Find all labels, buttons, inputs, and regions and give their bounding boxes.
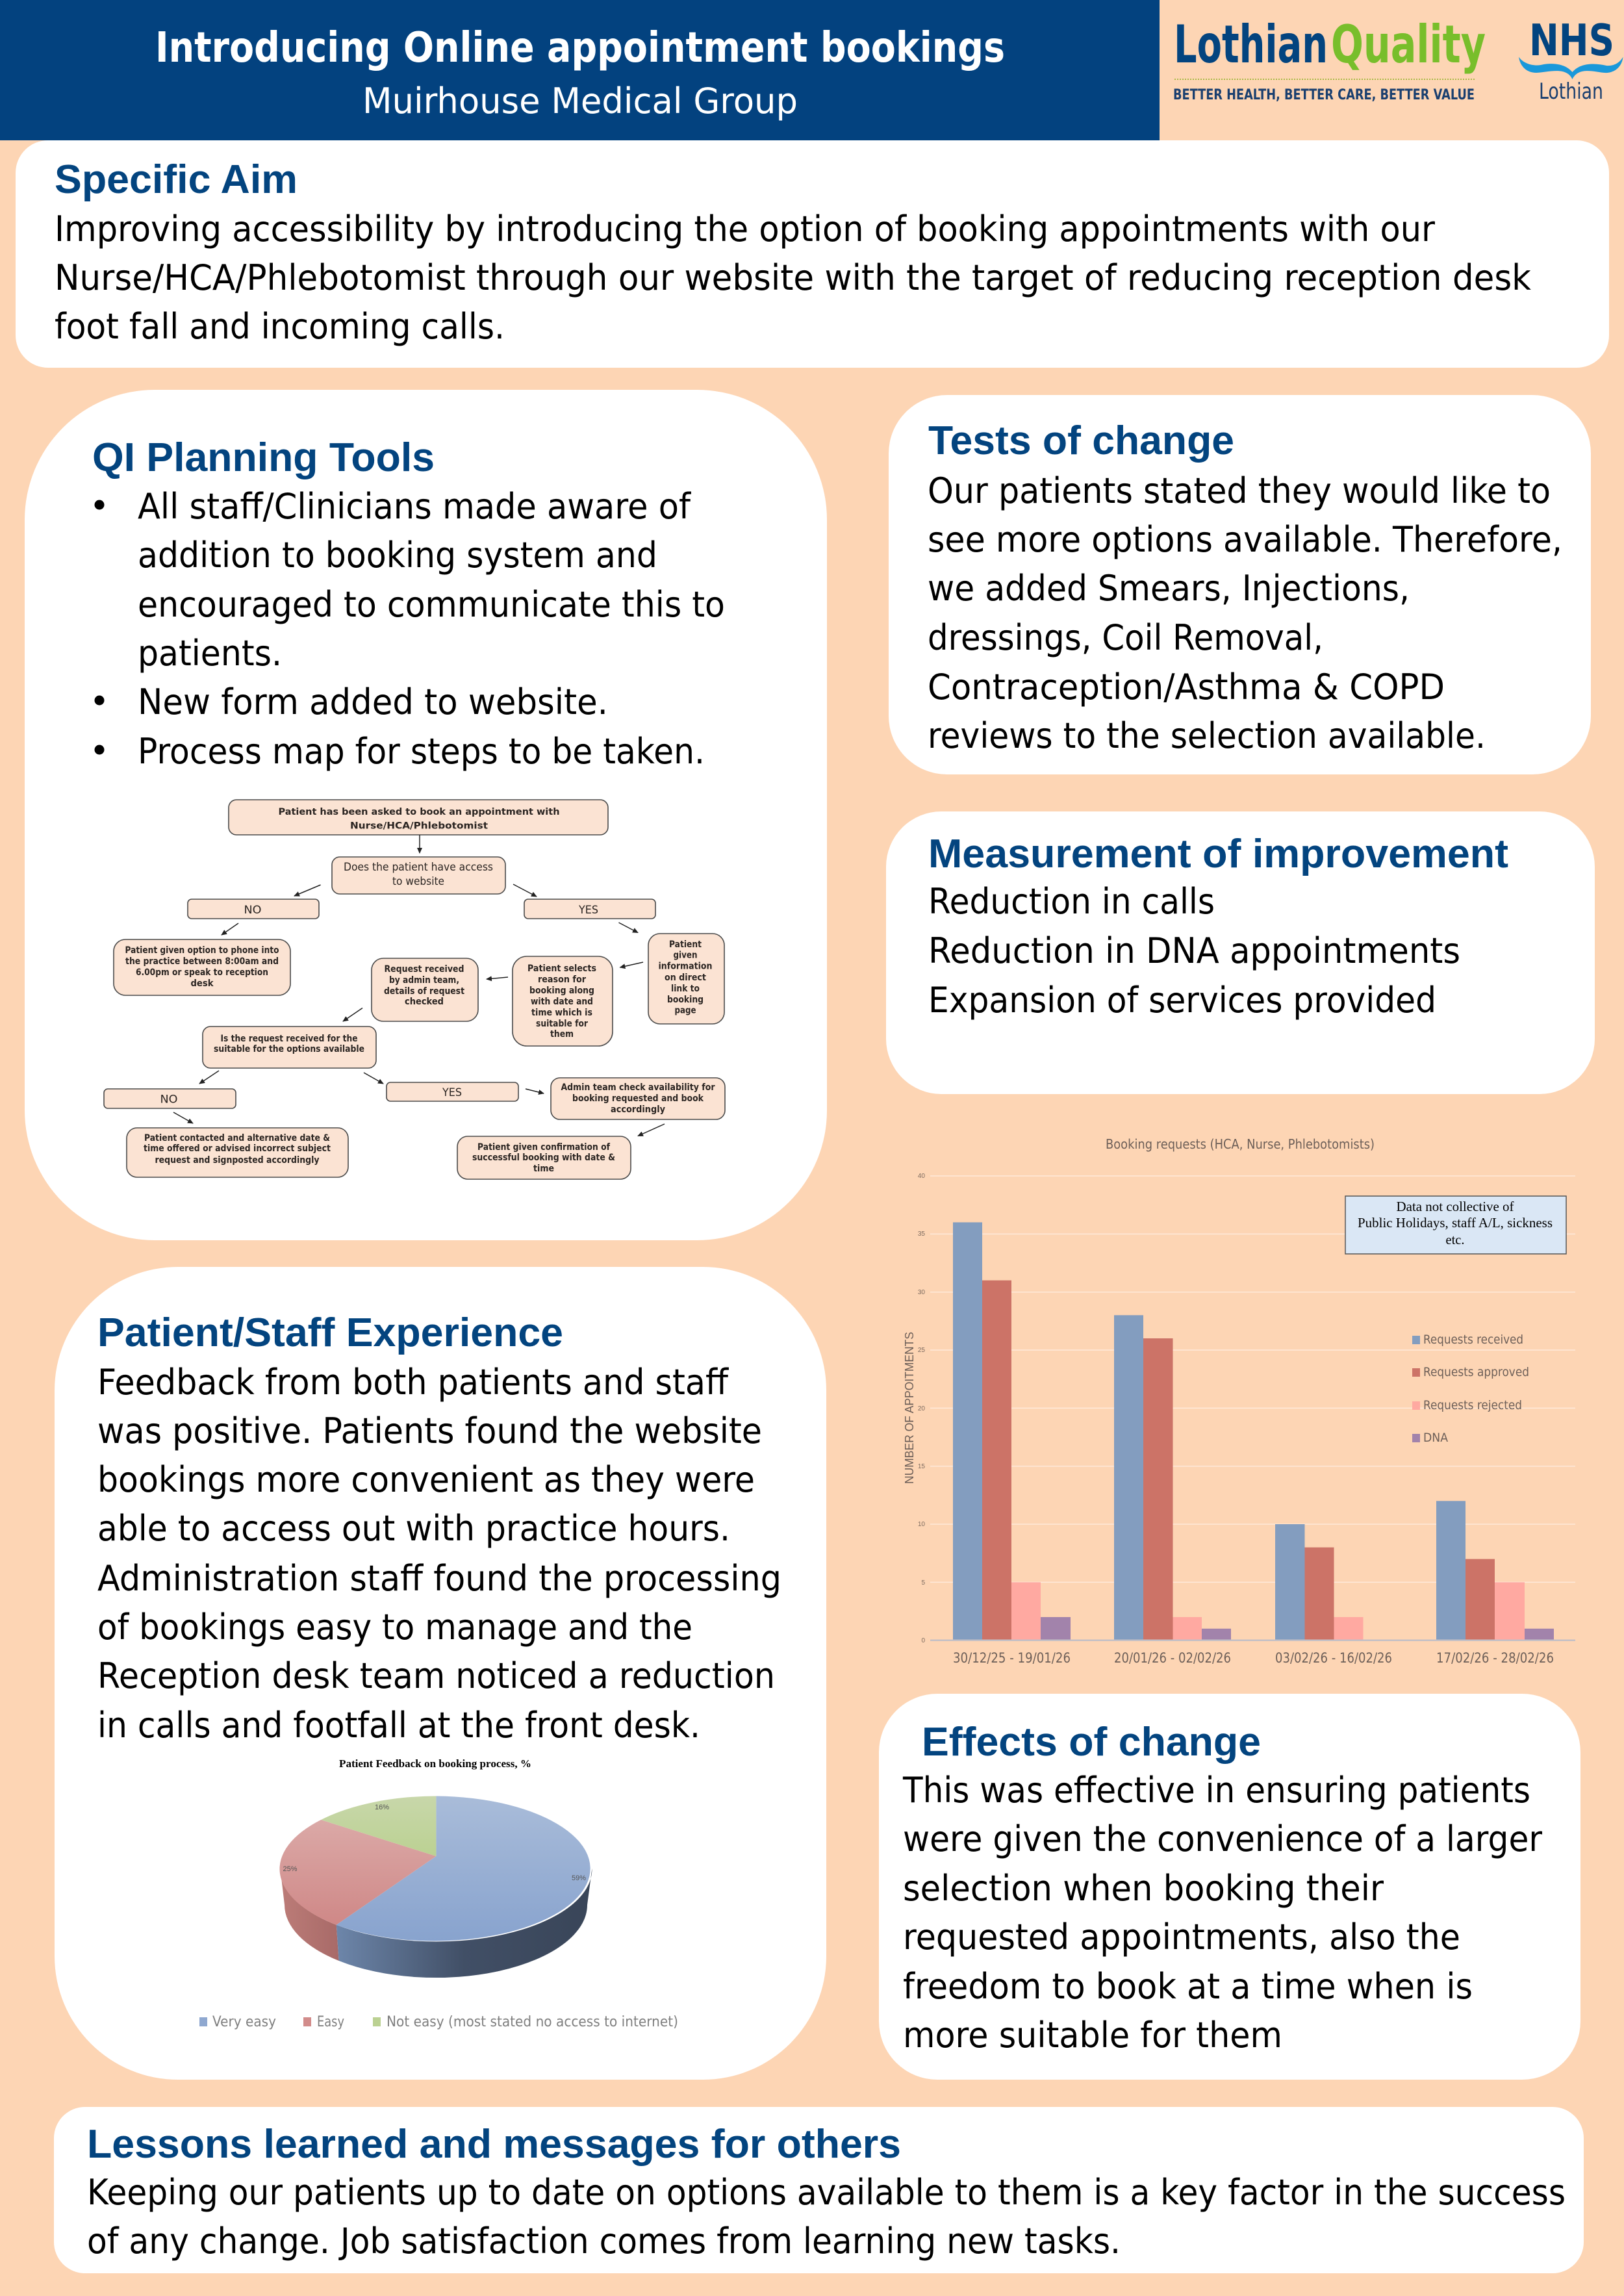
text: patient staff experience: able to access out with practice hours.	[97, 1508, 730, 1549]
flow box: confirmation: time	[533, 1164, 554, 1174]
flow box: suitability question: Is the request received for the	[221, 1034, 358, 1044]
x axis labels: 17/02/26 - 28/02/26	[1436, 1650, 1554, 1666]
text: effects of change: more suitable for them	[903, 2015, 1282, 2056]
text: patient staff experience: was positive. Patients found the website	[97, 1410, 762, 1451]
y axis ticks	[918, 1173, 925, 1644]
flow box: phone option: desk	[191, 978, 214, 989]
text: specific aim: Improving accessibility by introducing the option of booking appointments with our	[55, 209, 1436, 249]
heading: measurement of improvement: Measurement of improvement	[928, 832, 1508, 876]
callout: data note	[1345, 1196, 1566, 1254]
flow box: request received	[372, 958, 478, 1021]
pie value labels: 59%	[572, 1874, 586, 1882]
flow box: direct link info: information	[659, 962, 712, 972]
flow box: request received: checked	[405, 997, 444, 1007]
flow box: direct link info: on direct	[665, 973, 706, 983]
x axis labels	[953, 1650, 1554, 1666]
pie title: Patient Feedback on booking process, %	[339, 1757, 531, 1770]
flow arrows	[173, 835, 665, 1136]
pie value labels	[283, 1804, 586, 1882]
heading: QI planning tools: QI Planning Tools	[92, 435, 435, 480]
text: patient staff experience	[97, 1362, 781, 1746]
panel: tests of change	[889, 395, 1591, 774]
panel: lessons learned	[54, 2107, 1584, 2273]
flow box: no: NO	[244, 904, 261, 917]
logo: Lothian Quality: Quality	[1331, 14, 1486, 75]
subtitle: Muirhouse Medical Group	[362, 81, 798, 121]
bullet list: Process map for steps to be taken.	[138, 731, 705, 772]
flow box: patient selects	[513, 956, 613, 1046]
callout: data note: Public Holidays, staff A/L, sickness	[1358, 1215, 1553, 1231]
flow box: yes: YES	[578, 904, 598, 917]
y axis ticks: 5	[921, 1579, 925, 1587]
y axis ticks: 10	[918, 1521, 925, 1528]
chart legend: DNA	[1423, 1431, 1448, 1445]
flow box: patient selects: time which is	[531, 1008, 592, 1018]
text: lessons learned	[87, 2172, 1566, 2262]
flow box: start: Nurse/HCA/Phlebotomist	[350, 821, 488, 832]
callout: data note: Data not collective of	[1397, 1199, 1514, 1214]
text: patient staff experience: in calls and footfall at the front desk.	[97, 1705, 700, 1746]
bars: 17/02/26 - 28/02/26	[1436, 1501, 1554, 1640]
panel: patient staff experience	[55, 1267, 826, 2080]
pie legend: Not easy (most stated no access to internet)	[387, 2014, 678, 2030]
text: patient staff experience: Reception desk team noticed a reduction	[97, 1655, 775, 1696]
pie side: very easy	[336, 1869, 592, 1978]
heading: lessons learned: Lessons learned and messages for others	[87, 2122, 901, 2167]
text: specific aim: foot fall and incoming calls.	[55, 306, 505, 347]
text: lessons learned: of any change. Job satisfaction comes from learning new tasks.	[87, 2221, 1121, 2262]
pie legend: Easy	[317, 2014, 344, 2030]
flow box: start: Patient has been asked to book an appointment with	[278, 807, 560, 817]
flow box: direct link info: page	[674, 1006, 696, 1016]
text: effects of change: selection when booking their	[903, 1868, 1384, 1909]
y axis ticks: 20	[918, 1405, 925, 1412]
pie side: easy	[280, 1869, 339, 1961]
x axis labels: 20/01/26 - 02/02/26	[1114, 1650, 1231, 1666]
text: specific aim	[55, 209, 1532, 347]
logo: Lothian Quality: Lothian	[1174, 14, 1328, 75]
flow box: confirmation: Patient given confirmation of	[477, 1142, 611, 1153]
flow box: admin team check: accordingly	[611, 1104, 665, 1115]
flow box: patient selects: reason for	[538, 975, 587, 985]
text: patient staff experience: of bookings easy to manage and the	[97, 1607, 692, 1648]
panel: specific aim	[16, 140, 1609, 368]
flow box: patient contacted: Patient contacted and alternative date &	[144, 1133, 330, 1143]
flow box: confirmation: successful booking with date &	[472, 1153, 615, 1163]
text: patient staff experience: bookings more convenient as they were	[97, 1459, 755, 1500]
text: tests of change: Our patients stated they would like to	[928, 470, 1551, 511]
bullet list: All staff/Clinicians made aware of	[138, 486, 692, 527]
heading: patient staff experience: Patient/Staff Experience	[97, 1310, 563, 1355]
flow box: patient selects: booking along	[529, 986, 594, 996]
pie slice: easy	[279, 1820, 436, 1925]
flow box: patient contacted: request and signposted accordingly	[155, 1155, 320, 1166]
pie legend	[199, 2014, 678, 2030]
pie legend: Very easy	[212, 2014, 276, 2030]
callout: data note: etc.	[1446, 1232, 1464, 1247]
panel: effects of change	[879, 1694, 1580, 2080]
chart legend	[1412, 1333, 1529, 1445]
y axis title: NUMBER OF APPOITMENTS	[903, 1332, 916, 1484]
flow box: patient selects: with date and	[531, 997, 593, 1007]
flow box: request received: Request received	[385, 964, 464, 975]
y axis ticks: 0	[921, 1637, 925, 1644]
text: effects of change: requested appointments, also the	[903, 1917, 1460, 1958]
text: effects of change: freedom to book at a time when is	[903, 1966, 1473, 2007]
flow box: direct link info: Patient	[669, 939, 702, 950]
flow box: direct link info: link to	[671, 984, 700, 994]
y axis ticks: 40	[918, 1173, 925, 1180]
bullet list	[95, 486, 725, 772]
panel: QI planning tools	[25, 390, 827, 1240]
text: measurement of improvement: Expansion of services provided	[928, 980, 1436, 1021]
y axis ticks: 15	[918, 1463, 925, 1470]
flow box: patient selects: them	[550, 1029, 574, 1040]
flow box: phone option: 6.00pm or speak to reception	[136, 967, 268, 978]
text: effects of change	[902, 1770, 1543, 2056]
flow box: patient selects: suitable for	[536, 1019, 589, 1029]
y axis ticks: 25	[918, 1347, 925, 1354]
text: tests of change	[928, 470, 1562, 756]
chart legend: Requests rejected	[1423, 1398, 1522, 1412]
pie chart: patient feedback	[199, 1757, 678, 2030]
flow box: request received: by admin team,	[389, 975, 459, 986]
panel: measurement of improvement	[886, 811, 1595, 1094]
flow box: phone option	[114, 939, 290, 995]
flow box: yes 2	[387, 1082, 518, 1101]
flow box: patient contacted	[127, 1128, 348, 1177]
bullet list: encouraged to communicate this to	[138, 584, 725, 625]
flow box: direct link info	[648, 934, 724, 1024]
flow box: phone option: the practice between 8:00am and	[125, 956, 279, 967]
flow box: website access question	[332, 857, 505, 894]
bullet list: patients.	[138, 633, 282, 674]
pie value labels: 25%	[283, 1865, 298, 1873]
text: effects of change: were given the convenience of a larger	[903, 1818, 1543, 1859]
text: patient staff experience: Feedback from both patients and staff	[97, 1362, 730, 1403]
flow box: website access question: Does the patient have access	[344, 861, 493, 874]
bar chart: booking requests	[903, 1136, 1575, 1666]
bullet list: addition to booking system and	[138, 535, 657, 576]
text: effects of change: This was effective in ensuring patients	[902, 1770, 1530, 1811]
logo: Lothian Quality	[1173, 14, 1486, 103]
chart legend: Requests approved	[1423, 1365, 1529, 1379]
x axis labels: 03/02/26 - 16/02/26	[1275, 1650, 1392, 1666]
pie slice: not easy	[321, 1796, 436, 1856]
flow box: no	[188, 899, 319, 919]
y axis ticks: 35	[918, 1231, 925, 1238]
text: measurement of improvement: Reduction in calls	[928, 881, 1215, 922]
logo: Lothian Quality: BETTER HEALTH, BETTER CARE, BETTER VALUE	[1173, 87, 1475, 103]
text: tests of change: reviews to the selection available.	[928, 715, 1486, 756]
text: patient staff experience: Administration staff found the processing	[97, 1558, 781, 1599]
flow box: admin team check: Admin team check availability for	[561, 1082, 715, 1093]
chart legend: Requests received	[1423, 1333, 1523, 1347]
x axis labels: 30/12/25 - 19/01/26	[953, 1650, 1071, 1666]
text: tests of change: see more options available. Therefore,	[928, 519, 1562, 560]
flow box: direct link info: booking	[667, 995, 704, 1005]
y axis ticks: 30	[918, 1289, 925, 1296]
logo: NHS Lothian: Lothian	[1539, 79, 1603, 105]
flow box: admin team check: booking requested and book	[572, 1093, 704, 1104]
flow box: patient selects: Patient selects	[527, 963, 596, 974]
flow box: confirmation	[457, 1136, 631, 1179]
bullet list: New form added to website.	[138, 682, 608, 722]
logo: NHS Lothian	[1519, 15, 1623, 105]
text: tests of change: Contraception/Asthma & COPD	[928, 667, 1445, 708]
text: specific aim: Nurse/HCA/Phlebotomist through our website with the target of reducing reception desk	[55, 257, 1532, 298]
flow box: yes 2: YES	[442, 1086, 462, 1099]
heading: effects of change: Effects of change	[922, 1720, 1261, 1765]
pie value labels: 16%	[375, 1804, 389, 1811]
flow box: admin team check	[551, 1078, 725, 1119]
title: Introducing Online appointment bookings	[155, 24, 1005, 72]
chart title: Booking requests (HCA, Nurse, Phlebotomists)	[1106, 1136, 1375, 1152]
flow box: request received: details of request	[384, 986, 464, 997]
flow box: no 2: NO	[160, 1093, 178, 1106]
flow box: website access question: to website	[392, 875, 444, 888]
flow box: yes	[524, 899, 655, 919]
flow box: no 2	[104, 1089, 236, 1108]
bars: 30/12/25 - 19/01/26	[953, 1222, 1071, 1640]
flow box: phone option: Patient given option to phone into	[125, 945, 279, 956]
flow box: suitability question	[203, 1027, 376, 1068]
pie slice: very easy	[336, 1796, 590, 1941]
text: measurement of improvement	[928, 881, 1460, 1021]
header banner	[0, 0, 1160, 140]
flow box: direct link info: given	[673, 950, 698, 960]
flow box: patient contacted: time offered or advised incorrect subject	[144, 1143, 331, 1154]
flow box: start	[229, 800, 608, 835]
text: tests of change: dressings, Coil Removal,	[928, 617, 1323, 658]
text: tests of change: we added Smears, Injections,	[928, 568, 1410, 609]
bars: 20/01/26 - 02/02/26	[1114, 1315, 1231, 1640]
process map flowchart	[104, 800, 725, 1179]
bars: 03/02/26 - 16/02/26	[1275, 1524, 1363, 1640]
heading: specific aim: Specific Aim	[55, 157, 298, 202]
flow box: suitability question: suitable for the options available	[214, 1044, 364, 1054]
heading: tests of change: Tests of change	[928, 418, 1234, 463]
text: measurement of improvement: Reduction in DNA appointments	[928, 930, 1460, 971]
